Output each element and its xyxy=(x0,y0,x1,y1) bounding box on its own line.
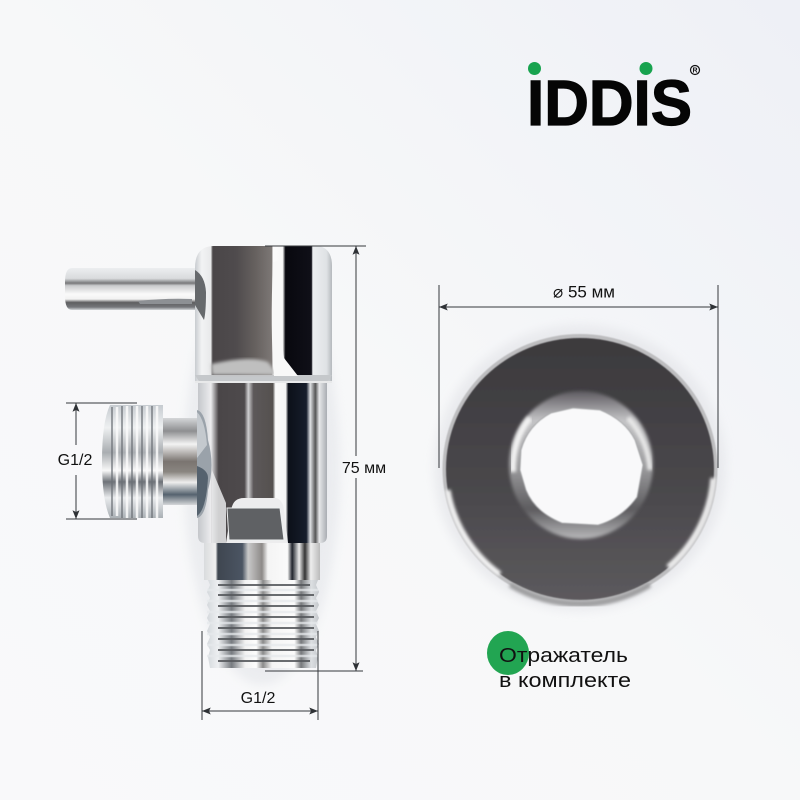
callout: reflector included xyxy=(487,631,631,692)
shadow xyxy=(184,255,340,685)
valve illustration xyxy=(65,246,340,685)
ring xyxy=(442,334,718,604)
neck xyxy=(204,543,320,580)
bottom thread xyxy=(207,580,319,668)
dimension: G1/2 bottom: G1/2 xyxy=(241,690,275,707)
lower body xyxy=(198,382,327,543)
dimension: G1/2 bottom xyxy=(202,631,318,720)
dimension: 75 mm: 75 мм xyxy=(342,460,386,477)
top cylinder xyxy=(195,246,332,383)
dimension: 75 mm xyxy=(265,246,386,671)
reflector disc xyxy=(434,325,726,611)
inner bevel xyxy=(509,391,653,539)
dimension: diameter 55 mm xyxy=(439,282,718,468)
logo: IDDIS: R xyxy=(692,68,698,74)
dimension: G1/2 side xyxy=(58,403,137,519)
handle xyxy=(65,268,197,310)
side flange xyxy=(197,410,212,518)
callout: reflector included: Отражатель xyxy=(499,645,628,667)
callout: reflector included: в комплекте xyxy=(499,670,631,692)
dimension: G1/2 side: G1/2 xyxy=(58,452,92,469)
dimension: diameter 55 mm: ⌀ 55 мм xyxy=(553,282,615,302)
side thread fitting xyxy=(102,405,204,518)
logo: IDDIS: IDDIS xyxy=(527,67,692,139)
hole xyxy=(520,408,643,525)
